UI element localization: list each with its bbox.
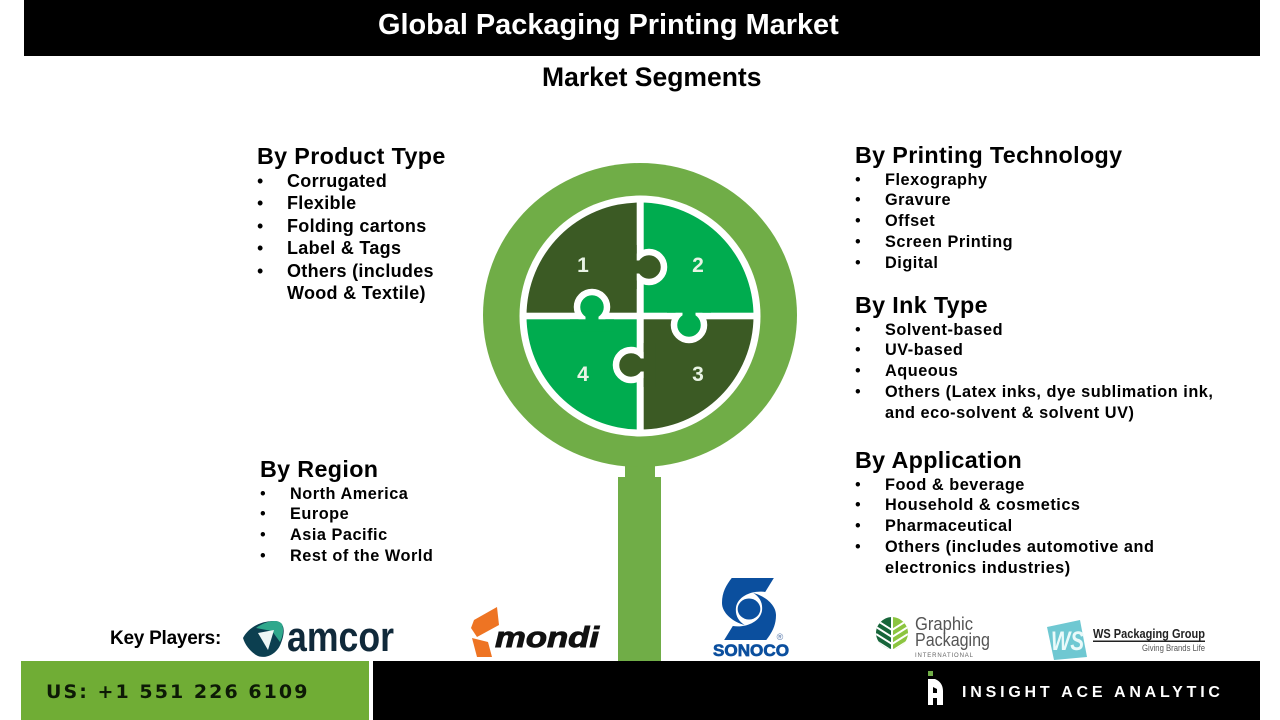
list: Screen Printing [885,233,1013,251]
logo: ws packaging group [1047,620,1205,660]
list [258,171,434,303]
title: Global Packaging Printing Market [378,9,839,41]
segment: by printing technology [855,142,1122,272]
list: UV-based [885,341,963,359]
list: Others (includes [287,261,434,281]
title bar [24,0,1260,56]
phone number: US: +1 551 226 6109 [46,681,309,703]
list: Others (includes automotive and [885,538,1154,556]
puzzle pieces [526,202,754,430]
footer: brand panel [373,661,1260,720]
list: Gravure [885,191,951,209]
list: Folding cartons [287,216,426,236]
list: Household & cosmetics [885,496,1080,514]
list [856,171,1013,272]
key players label: Key Players: [110,628,221,649]
list: Flexography [885,171,988,189]
list [260,485,433,565]
logo: sonoco: SONOCO [713,641,789,660]
magnifier puzzle graphic [483,163,797,661]
list: Offset [885,212,935,230]
puzzle numbers [577,254,704,386]
list: and eco-solvent & solvent UV) [885,404,1134,422]
heading: By Printing Technology [855,142,1122,168]
list: North America [290,485,408,503]
list: Label & Tags [287,238,401,258]
list: Pharmaceutical [885,517,1013,535]
list: Others (Latex inks, dye sublimation ink, [885,383,1213,401]
list: Digital [885,254,938,272]
list: Corrugated [287,171,387,191]
puzzle numbers: 4 [577,363,589,386]
logo: graphic packaging [876,613,990,659]
logo: amcor [243,615,394,660]
magnifier handle [618,455,661,667]
brand name: INSIGHT ACE ANALYTIC [962,684,1224,701]
logo: ws packaging group: WS [1051,626,1084,656]
list [856,476,1154,577]
logo: graphic packaging: Graphic [915,613,973,634]
list: Asia Pacific [290,526,388,544]
magnifier ring [483,163,797,467]
list [856,321,1213,422]
footer: phone panel [21,661,369,720]
logo: graphic packaging: INTERNATIONAL [915,653,974,659]
list: Food & beverage [885,476,1025,494]
segment: by region [260,456,433,565]
list: Europe [290,505,349,523]
segment: by ink type [855,292,1213,422]
subtitle: Market Segments [542,62,761,92]
heading: By Product Type [257,143,446,169]
list: Wood & Textile) [287,283,426,303]
list: Flexible [287,193,356,213]
logo: mondi: mondi [495,622,600,654]
logo: sonoco: ® [777,632,784,642]
puzzle numbers: 1 [577,254,589,277]
segment: by application [855,447,1154,577]
segment: by product type [257,143,446,303]
logo: mondi [471,607,600,657]
brand icon [928,671,943,705]
list: Rest of the World [290,547,433,565]
list: Solvent-based [885,321,1003,339]
heading: By Region [260,456,378,482]
logo: sonoco [713,578,789,660]
puzzle numbers: 2 [692,254,704,277]
heading: By Ink Type [855,292,988,318]
puzzle numbers: 3 [692,363,704,386]
list: Aqueous [885,362,958,380]
heading: By Application [855,447,1022,473]
list: electronics industries) [885,559,1071,577]
